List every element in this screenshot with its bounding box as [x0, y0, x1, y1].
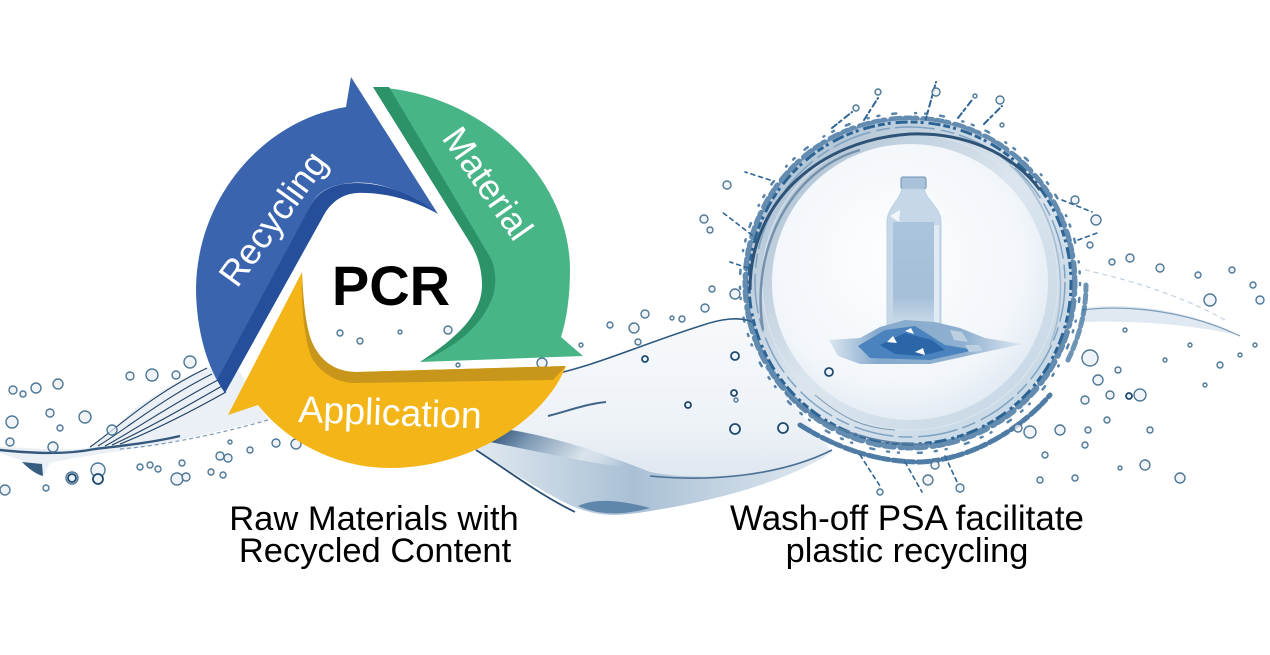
recycled bottle in water: [829, 177, 1022, 364]
bottle: [887, 177, 941, 328]
splash foam around ring: [722, 82, 1100, 492]
caption: raw materials: Raw Materials with: [229, 500, 519, 538]
cycle diagram: PCR: [196, 77, 583, 468]
water wave: right tail: [1082, 270, 1240, 336]
water wave: central swell: [470, 319, 832, 515]
water droplets: [0, 88, 1264, 495]
arrow: Recycling: [196, 77, 438, 393]
label: Application: Application: [298, 388, 483, 436]
water ring with splash: [722, 82, 1100, 492]
arrow: Material: [373, 87, 583, 362]
center label: PCR: PCR: [332, 254, 450, 317]
label: Recycling: Recycling: [210, 143, 335, 294]
caption: wash-off PSA: plastic recycling: [786, 532, 1028, 570]
caption: wash-off PSA: Wash-off PSA facilitate: [730, 499, 1084, 538]
caption: raw materials: Recycled Content: [239, 532, 512, 570]
arrow: Application: [228, 272, 566, 468]
water wave: left tail: [0, 368, 268, 477]
label: Material: Material: [434, 119, 541, 247]
plastic flakes: [829, 320, 1022, 364]
